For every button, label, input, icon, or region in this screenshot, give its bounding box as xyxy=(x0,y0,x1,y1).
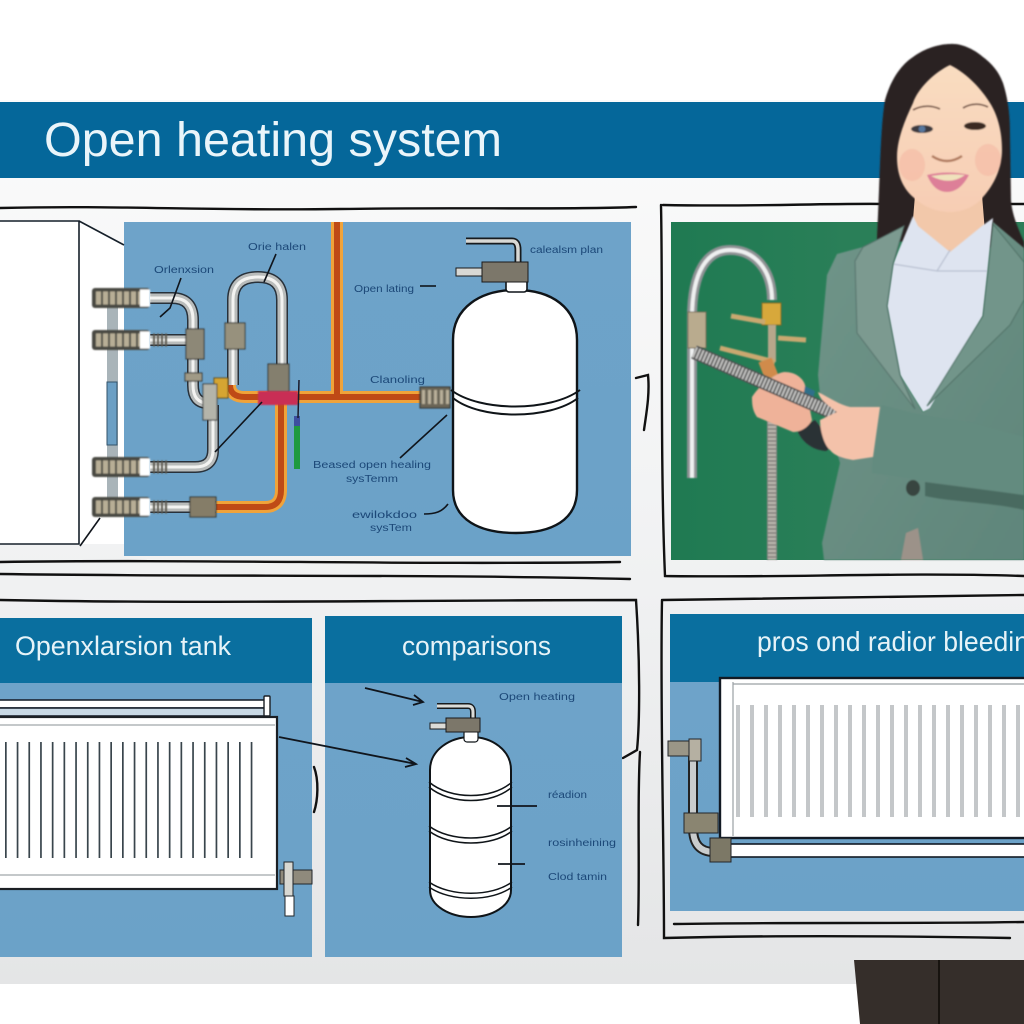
shirt xyxy=(887,216,993,412)
red valve strip xyxy=(258,391,298,405)
hand-drawn frame lines xyxy=(0,204,1024,938)
panel header xyxy=(0,618,312,683)
large radiator xyxy=(668,678,1024,862)
small expansion tank xyxy=(429,706,512,917)
labels: Clanoling xyxy=(370,375,425,386)
labels: ewilokdoo xyxy=(352,510,418,521)
tank labels xyxy=(499,692,616,883)
panel background xyxy=(124,222,631,556)
silver pipes xyxy=(150,277,282,507)
eyebrows xyxy=(913,104,988,110)
panel background xyxy=(325,683,622,957)
labels: sysTem xyxy=(370,523,412,534)
panel: comparisons xyxy=(279,616,622,957)
labels: sysTemm xyxy=(346,474,398,485)
panel background xyxy=(670,682,1024,911)
labels: Orlenxsion xyxy=(154,265,214,276)
blue tag xyxy=(803,386,815,403)
rear hand xyxy=(752,372,812,432)
tank labels: Clod tamin xyxy=(548,872,607,883)
panel: open expansion tank radiator xyxy=(0,618,312,957)
corrugated hose xyxy=(694,352,836,414)
side pipework and valves xyxy=(668,739,731,862)
labels xyxy=(154,242,603,534)
trousers xyxy=(854,960,1024,1024)
arrows and pointers xyxy=(279,688,537,864)
title: Open heating system xyxy=(44,114,502,167)
photo of pipe assembly xyxy=(688,250,806,560)
expansion tank xyxy=(451,241,580,533)
front opening and skirt xyxy=(901,528,923,560)
brass and steel fittings xyxy=(92,288,450,517)
blazer xyxy=(818,222,1024,560)
panel header xyxy=(325,616,622,683)
nose xyxy=(932,156,962,161)
radiator with top rail xyxy=(0,696,312,916)
left lapel xyxy=(855,226,915,409)
presenter xyxy=(694,44,1024,1024)
panel header xyxy=(670,614,1024,682)
green indicator xyxy=(294,380,300,469)
shadow under sleeve xyxy=(925,482,1024,510)
panel header: Openxlarsion tank xyxy=(15,631,231,661)
copper pipes xyxy=(216,222,422,507)
white wall box xyxy=(0,221,124,544)
tank labels: réadion xyxy=(548,790,587,801)
panel: main open heating system diagram xyxy=(0,221,631,556)
labels: Orie halen xyxy=(248,242,306,253)
right lapel xyxy=(927,224,1024,406)
labels: Beased open healing xyxy=(313,460,431,471)
cuff xyxy=(797,420,835,451)
title banner xyxy=(0,102,1024,178)
sleeve xyxy=(872,405,1024,495)
green backdrop xyxy=(671,222,1024,560)
mouth xyxy=(927,172,969,192)
panel: green photo with pipe and presenter xyxy=(671,222,1024,560)
radiator valve xyxy=(280,862,312,916)
tank labels: rosinheining xyxy=(548,838,616,849)
label: pointer lines xyxy=(80,254,448,546)
panel header: comparisons xyxy=(402,631,551,661)
labels: Open lating xyxy=(354,284,414,295)
labels: calealsm plan xyxy=(530,245,603,256)
hair xyxy=(877,44,1024,250)
eyes xyxy=(911,122,986,133)
vertical gauge tube on wall xyxy=(107,305,118,510)
panel background xyxy=(0,683,312,957)
panel: pros and radiator bleeding xyxy=(668,614,1024,911)
face xyxy=(897,65,1002,212)
tank labels: Open heating xyxy=(499,692,575,703)
hands holding hose xyxy=(694,352,880,460)
jacket button xyxy=(906,480,920,496)
neck xyxy=(912,195,985,256)
front hand xyxy=(818,392,880,460)
